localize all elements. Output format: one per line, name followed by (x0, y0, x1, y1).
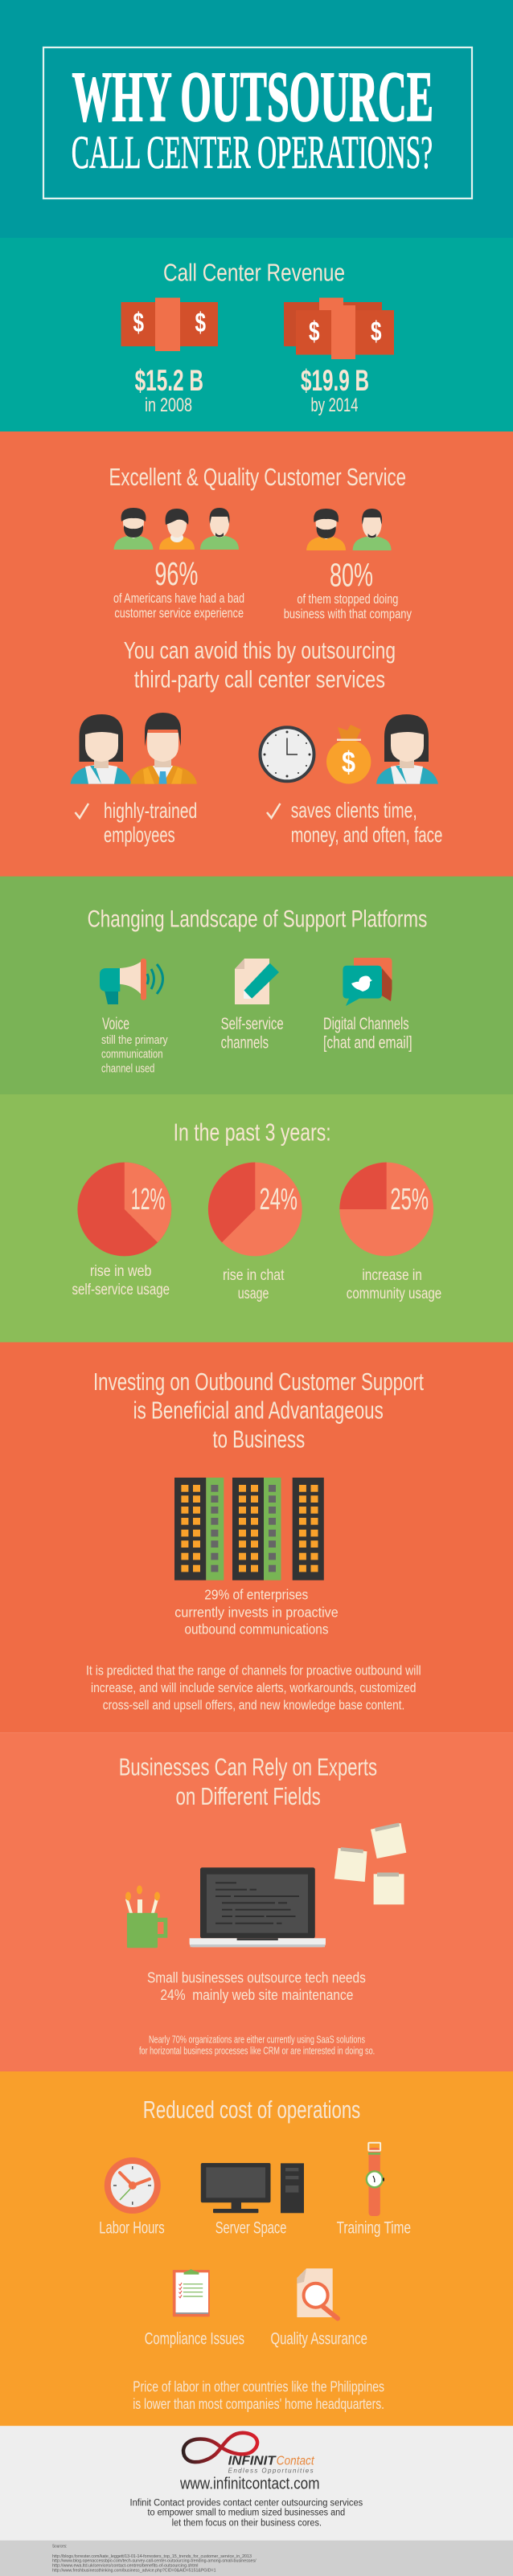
label: chat usage: rise in chat (223, 1267, 285, 1284)
SaaS note: Nearly 70% organizations are either currently using SaaS solutions (149, 2034, 365, 2045)
icon: money 2014: $ (309, 317, 320, 347)
panel: support platforms (0, 877, 513, 1094)
stat: 96 percent: customer service experience (114, 606, 244, 620)
stat: small business tech: 24% mainly web site maintenance (160, 1987, 353, 2003)
icon: money bag (326, 725, 371, 784)
stat: 29 percent: outbound communications (185, 1621, 329, 1638)
label: server space: Server Space (215, 2218, 286, 2237)
label: community usage: community usage (347, 1286, 441, 1302)
website: www.infinitcontact.com (179, 2475, 320, 2492)
label: self-service (221, 1015, 284, 1053)
icon: document and pencil (235, 959, 279, 1004)
logo: Contact (277, 2454, 314, 2468)
label: voice: still the primary (101, 1033, 168, 1047)
company description: let them focus on their business cores. (172, 2518, 322, 2528)
prediction text: increase, and will include service alerts, workarounds, customized (91, 1680, 417, 1695)
icon: money 2008: $ (133, 308, 144, 338)
subheading: third-party call center services (134, 666, 385, 693)
panel: past 3 years (0, 1094, 513, 1342)
company description (130, 2498, 363, 2528)
heading (119, 1752, 377, 1810)
prediction text: cross-sell and upsell offers, and new knowledge base content. (103, 1698, 404, 1713)
prediction text: It is predicted that the range of channels for proactive outbound will (86, 1662, 421, 1678)
heading: Reduced cost of operations (143, 2096, 360, 2124)
label: training time: Training Time (337, 2218, 411, 2237)
icon: sticky notes (334, 1822, 406, 1904)
label: voice: channel used (101, 1062, 154, 1075)
label: community usage (347, 1267, 441, 1302)
panel: experts (0, 1733, 513, 2071)
label: web self-service (72, 1263, 170, 1298)
label: voice: communication (101, 1048, 163, 1061)
stat: 29 percent (174, 1587, 339, 1638)
title heading (72, 58, 433, 178)
heading: is Beneficial and Advantageous (133, 1396, 384, 1425)
panel: reduced cost (0, 2071, 513, 2426)
prediction text (86, 1662, 421, 1713)
company description: Infinit Contact provides contact center outsourcing services (130, 2498, 363, 2508)
pie chart: 24 percent: 24% (260, 1183, 298, 1216)
stat: 96 percent: of Americans have had a bad (113, 591, 244, 606)
label: digital channels: [chat and email] (323, 1034, 412, 1053)
pie chart: 25 percent (339, 1163, 433, 1256)
label: digital channels (323, 1015, 412, 1053)
label: digital channels: Digital Channels (323, 1015, 409, 1033)
check: highly trained (76, 799, 197, 847)
label: self-service: Self-service (221, 1015, 284, 1033)
icon: money bag: $ (342, 746, 355, 779)
stat: 29 percent: 29% of enterprises (204, 1587, 309, 1603)
icon: clock (261, 727, 314, 781)
stat: 2014 revenue: $19.9 B (301, 364, 369, 397)
icon: two people (306, 509, 392, 550)
stat: 2008 revenue: in 2008 (145, 395, 192, 416)
panel: call center revenue (0, 238, 513, 431)
label: chat usage (223, 1267, 285, 1302)
source list: http://blogs.forrester.com/kate_leggett/13-01-14-forresters_top_15_trends_for_customer_service_in_2013 (52, 2554, 252, 2559)
check: highly trained: employees (104, 823, 175, 847)
icon: wristwatch (367, 2143, 384, 2216)
icon: magnifier on document (297, 2268, 338, 2319)
icon: desktop computer (201, 2163, 304, 2213)
check: saves clients: saves clients time, (291, 799, 417, 823)
stat: 80 percent: 80% (330, 556, 373, 593)
title frame (43, 47, 472, 198)
icon: money 2008 (121, 297, 218, 351)
label: compliance issues: Compliance Issues (145, 2329, 244, 2348)
stat: 80 percent (284, 556, 412, 622)
heading: Excellent & Quality Customer Service (109, 463, 406, 491)
icon: three people (114, 508, 239, 550)
stat: 80 percent: business with that company (284, 607, 412, 622)
stat: small business tech (147, 1969, 366, 2003)
panel: title (0, 0, 513, 238)
heading: to Business (212, 1425, 305, 1454)
icon: wall clock (105, 2157, 161, 2214)
icon: megaphone (100, 959, 162, 1004)
heading (93, 1368, 424, 1454)
source list: http://www.blog.openaccessbpo.com/tech-survey-call-center-outsourcing-trending-among-small-businesses/ (52, 2559, 256, 2564)
heading: on Different Fields (175, 1782, 321, 1810)
source list: Sources: (52, 2545, 67, 2549)
icon: chat bubbles (343, 958, 392, 1006)
source list (52, 2545, 256, 2574)
stat: 80 percent: of them stopped doing (297, 592, 398, 607)
stat: 29 percent: currently invests in proactive (174, 1604, 339, 1620)
stat: 2014 revenue (301, 364, 369, 416)
label: chat usage: usage (238, 1286, 269, 1302)
panel: sources (0, 2541, 513, 2576)
logo (183, 2433, 314, 2474)
heading: Businesses Can Rely on Experts (119, 1752, 377, 1781)
pie chart: 25 percent: 25% (390, 1183, 429, 1216)
logo: INFINIT (228, 2454, 277, 2468)
SaaS note (139, 2034, 375, 2057)
stat: small business tech: Small businesses outsource tech needs (147, 1969, 366, 1985)
label: web self-service: rise in web (90, 1263, 151, 1280)
source list: http://www.ewa.ltd.uk/services/contact-centres/benefits-of-outsourcing.shtml (52, 2564, 198, 2569)
subheading: You can avoid this by outsourcing (124, 638, 396, 664)
panel: outbound support (0, 1342, 513, 1733)
labor price note (133, 2379, 384, 2412)
icon: office buildings (174, 1478, 324, 1580)
icon: woman saving (376, 714, 438, 784)
heading: In the past 3 years: (174, 1118, 331, 1146)
check: saves clients: money, and often, face (291, 823, 442, 847)
subheading (124, 638, 396, 693)
label: voice: Voice (102, 1015, 129, 1033)
icon: man employee (130, 713, 197, 784)
panel: customer service (0, 431, 513, 877)
label: labor hours: Labor Hours (99, 2218, 165, 2237)
pie chart: 12 percent (77, 1163, 171, 1256)
stat: 2008 revenue (135, 364, 203, 416)
check: saves clients (267, 799, 442, 847)
pie chart: 12 percent: 12% (131, 1183, 166, 1216)
stat: 96 percent: 96% (154, 555, 198, 592)
check: highly trained: highly-trained (104, 799, 197, 823)
label: web self-service: self-service usage (72, 1282, 170, 1298)
icon: money 2008: $ (195, 308, 206, 338)
label: voice (101, 1015, 168, 1075)
stat: 2014 revenue: by 2014 (310, 395, 359, 416)
logo: Endless Opportunities (228, 2467, 314, 2474)
label: self-service: channels (221, 1034, 269, 1053)
icon: money 2014: $ (371, 317, 382, 347)
labor price note: is lower than most companies' home headquarters. (133, 2396, 384, 2412)
source list: http://www.freshbusinessthinking.com/business_advice.php?CID=0&AID=5151&PGID=1 (52, 2569, 216, 2574)
icon: clipboard (173, 2269, 210, 2316)
label: community usage: increase in (362, 1267, 422, 1284)
icon: money 2014 (284, 297, 394, 359)
company description: to empower small to medium sized businesses and (148, 2509, 345, 2518)
icon: pencil mug (125, 1885, 167, 1948)
icon: woman employee (71, 714, 131, 784)
icon: laptop (190, 1867, 326, 1947)
pie chart: 24 percent (208, 1163, 302, 1256)
panel: footer (0, 2426, 513, 2541)
labor price note: Price of labor in other countries like the Philippines (133, 2379, 384, 2395)
stat: 96 percent (113, 555, 244, 620)
heading: Call Center Revenue (163, 259, 345, 286)
stat: 2008 revenue: $15.2 B (135, 364, 203, 397)
label: quality assurance: Quality Assurance (270, 2329, 367, 2348)
SaaS note: for horizontal business processes like CRM or are interested in doing so. (139, 2046, 375, 2057)
